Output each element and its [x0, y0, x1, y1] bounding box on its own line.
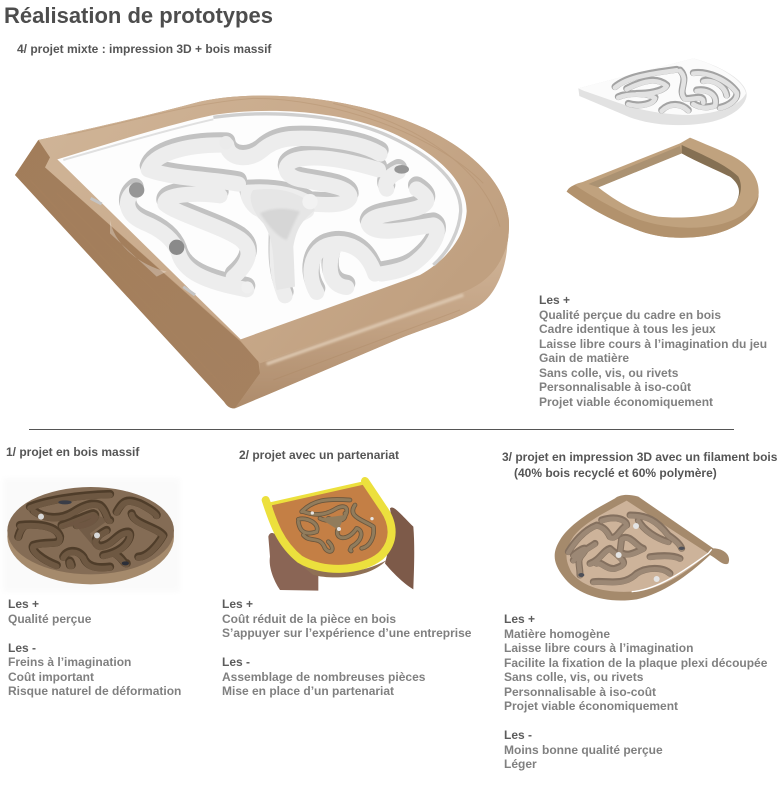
frame left bevel — [15, 140, 260, 408]
text block: project 4 advantages: Les + — [539, 293, 570, 307]
text block: project 1 pros and cons: Risque naturel de déformation — [8, 684, 181, 698]
white 3D printed plate — [57, 111, 467, 339]
steel and dark balls — [38, 500, 129, 565]
text block: project 2 pros and cons: Assemblage de nombreuses pièces — [222, 670, 425, 684]
heading: project 3 — [502, 450, 777, 480]
frame rounded front — [235, 243, 507, 408]
text block: project 3 pros and cons: Projet viable économiquement — [504, 699, 678, 713]
heading: project 3: (40% bois recyclé et 60% polymère) — [514, 466, 717, 480]
heading: project 2: 2/ projet avec un partenariat — [239, 448, 399, 462]
text block: project 4 advantages: Personnalisable à iso-coût — [539, 380, 691, 394]
cork surface — [272, 483, 392, 568]
main illustration: mixed wooden frame and 3D printed maze — [15, 96, 509, 408]
heading: project 4: 4/ projet mixte : impression 3D + bois massif — [17, 42, 271, 56]
maze grooves — [128, 134, 437, 296]
heading: project 1: 1/ projet en bois massif — [6, 445, 139, 459]
text block: project 2 pros and cons: Les + — [222, 597, 253, 611]
left hand — [268, 533, 318, 591]
text block: project 3 pros and cons: Moins bonne qualité perçue — [504, 742, 663, 756]
text block: project 2 pros and cons — [222, 597, 471, 698]
text block: project 2 pros and cons: Les - — [222, 655, 250, 669]
yellow frame — [266, 481, 392, 569]
top-right illustration: white 3D printed maze — [578, 58, 747, 125]
text block: project 4 advantages: Sans colle, vis, ou rivets — [539, 366, 678, 380]
text block: project 3 pros and cons: Les + — [504, 612, 535, 626]
bottom-centre illustration: cork maze held in hands with yellow frame — [266, 481, 414, 591]
text block: project 2 pros and cons: Coût réduit de la pièce en bois — [222, 612, 396, 626]
text block: project 4 advantages: Cadre identique à tous les jeux — [539, 322, 716, 336]
text block: project 3 pros and cons — [504, 612, 767, 771]
text block: project 4 advantages: Qualité perçue du cadre en bois — [539, 308, 721, 322]
top-right illustration: wooden frame — [567, 138, 759, 238]
text block: project 2 pros and cons: S’appuyer sur l’expérience d’une entreprise — [222, 626, 471, 640]
bottom-right illustration: wood filament maze — [555, 495, 729, 601]
clear plexi corner reflection — [110, 220, 167, 277]
frame top surface — [38, 96, 509, 363]
text block: project 3 pros and cons: Personnalisable à iso-coût — [504, 684, 656, 698]
text block: project 1 pros and cons: Les + — [8, 597, 39, 611]
text block: project 3 pros and cons: Laisse libre cours à l’imagination — [504, 641, 693, 655]
text block: project 1 pros and cons: Les - — [8, 640, 36, 654]
text block: project 3 pros and cons: Facilite la fixation de la plaque plexi découpée — [504, 656, 767, 670]
text block: project 1 pros and cons: Coût important — [8, 670, 94, 684]
text block: project 1 pros and cons — [8, 597, 181, 698]
balls — [129, 136, 409, 293]
steel balls — [578, 523, 685, 582]
text block: project 2 pros and cons: Mise en place d’un partenariat — [222, 684, 394, 698]
title: Réalisation de prototypes — [4, 3, 273, 28]
text block: project 4 advantages: Projet viable économiquement — [539, 394, 713, 408]
right hand — [385, 507, 414, 589]
text block: project 3 pros and cons: Léger — [504, 757, 537, 771]
text block: project 4 advantages: Laisse libre cours à l’imagination du jeu — [539, 336, 767, 350]
steel balls — [311, 511, 374, 531]
text block: project 4 advantages — [539, 293, 767, 408]
frame underside — [287, 553, 387, 577]
bottom-left illustration: solid wood maze disc — [3, 478, 180, 592]
heading: project 3: 3/ projet en impression 3D avec un filament bois — [502, 450, 777, 464]
text block: project 3 pros and cons: Matière homogène — [504, 626, 610, 640]
text block: project 4 advantages: Gain de matière — [539, 351, 629, 365]
text block: project 3 pros and cons: Sans colle, vis, ou rivets — [504, 670, 643, 684]
text block: project 1 pros and cons: Qualité perçue — [8, 612, 91, 626]
wooden frame body — [15, 96, 509, 408]
text block: project 3 pros and cons: Les - — [504, 728, 532, 742]
text block: project 1 pros and cons: Freins à l’imagination — [8, 655, 131, 669]
